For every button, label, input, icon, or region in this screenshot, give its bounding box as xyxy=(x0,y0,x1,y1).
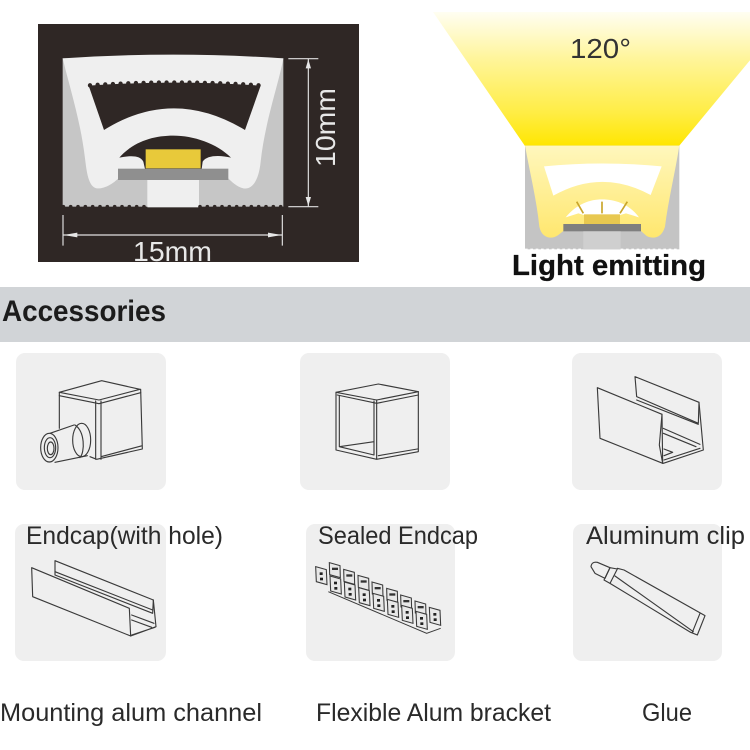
card: Flexible Alum bracket xyxy=(306,524,455,661)
heading: Accessories: Accessories xyxy=(2,295,166,328)
label: Mounting alum channel: Mounting alum channel xyxy=(0,699,262,727)
icon: flexible brackets xyxy=(316,563,441,633)
dimension: 10mm arrow xyxy=(288,59,318,207)
panel: light emitting diagram xyxy=(433,12,750,282)
light beam cone xyxy=(433,12,750,146)
label: 10mm: 10mm xyxy=(310,88,341,167)
label: 15mm: 15mm xyxy=(133,236,212,267)
panel: cross-section dimensions xyxy=(38,24,359,267)
icon: endcap with hole xyxy=(41,381,142,462)
label: Light emitting: Light emitting xyxy=(512,250,706,282)
label: Glue: Glue xyxy=(642,699,692,727)
diagram: lit profile xyxy=(525,146,679,249)
banner: Accessories xyxy=(0,287,750,342)
card: Endcap with hole xyxy=(16,353,166,490)
icon: sealed endcap xyxy=(336,384,418,459)
diagram: profile cross-section xyxy=(63,55,283,208)
card: Sealed Endcap xyxy=(300,353,450,490)
card: Aluminum clip xyxy=(572,353,722,490)
card: Glue xyxy=(573,524,722,661)
label: Flexible Alum bracket: Flexible Alum bracket xyxy=(316,699,551,727)
icon: mounting channel xyxy=(32,561,156,636)
label: 120 degrees: 120° xyxy=(570,33,631,64)
card: Mounting alum channel xyxy=(15,524,166,661)
label: Endcap(with hole): Endcap(with hole) xyxy=(26,522,223,550)
dimension: 15mm arrow xyxy=(63,215,282,246)
icon: aluminum clip xyxy=(597,377,703,463)
label: Sealed Endcap: Sealed Endcap xyxy=(318,522,478,550)
label: Aluminum clip: Aluminum clip xyxy=(586,522,745,550)
icon: glue tube xyxy=(591,562,705,635)
